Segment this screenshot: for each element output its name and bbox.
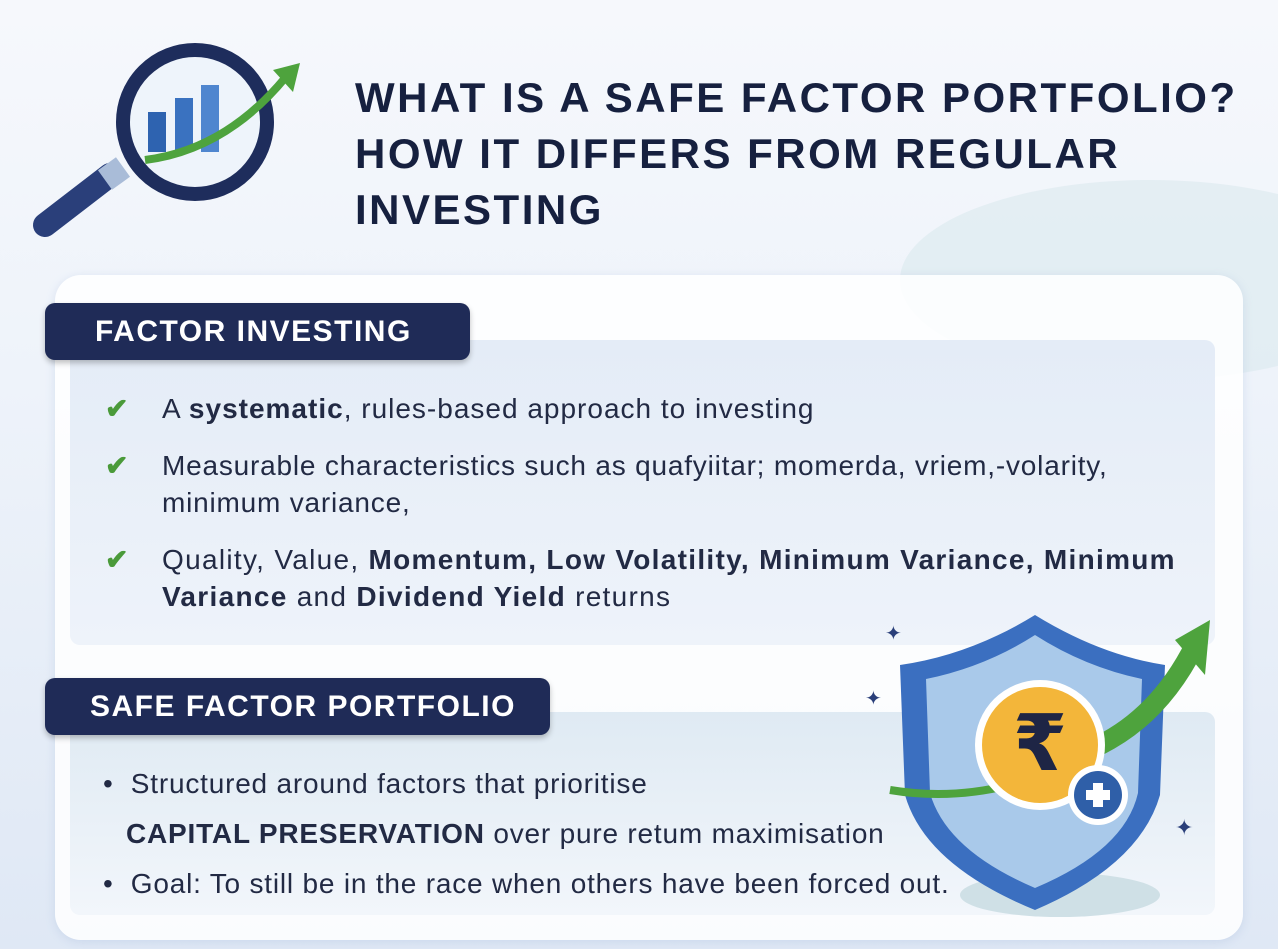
heading: factor investing: FACTOR INVESTING	[95, 315, 412, 348]
panel: safe factor portfolio	[70, 712, 1215, 915]
icon: shield with rupee coin and arrow: ✦	[865, 688, 882, 710]
icon: magnifying glass with bar chart	[33, 43, 300, 237]
bullet list: factor investing: ✔	[105, 393, 129, 424]
bullet list: safe factor portfolio	[103, 768, 950, 899]
bullet list: factor investing: Variance and Dividend Yield returns	[162, 581, 671, 612]
bullet list: factor investing	[105, 393, 1176, 612]
bullet list: factor investing: ✔	[105, 450, 129, 481]
bullet list: safe factor portfolio: • Structured around factors that prioritise	[103, 768, 648, 799]
bullet list: factor investing: Quality, Value, Momentum, Low Volatility, Minimum Variance, Minimum	[162, 544, 1176, 575]
heading: safe factor portfolio: SAFE FACTOR PORTFOLIO	[90, 690, 516, 723]
bullet list: factor investing: Measurable characteristics such as quafyiitar; momerda, vriem,-volarity,	[162, 450, 1108, 481]
bullet list: safe factor portfolio: CAPITAL PRESERVATION over pure retum maximisation	[126, 818, 885, 849]
main card	[55, 275, 1243, 940]
icon: shield with rupee coin and arrow	[865, 615, 1210, 917]
title: INVESTING	[355, 186, 604, 233]
title: HOW IT DIFFERS FROM REGULAR	[355, 130, 1120, 177]
bullet list: factor investing: A systematic, rules-based approach to investing	[162, 393, 815, 424]
title	[355, 74, 1238, 233]
background decorative blob	[900, 180, 1278, 380]
bullet list: factor investing: minimum variance,	[162, 487, 411, 518]
bullet list: factor investing: ✔	[105, 544, 130, 575]
title: WHAT IS A SAFE FACTOR PORTFOLIO?	[355, 74, 1238, 121]
heading: safe factor portfolio	[45, 678, 550, 735]
bullet list: safe factor portfolio: • Goal: To still be in the race when others have been forced out.	[103, 868, 950, 899]
icon: shield with rupee coin and arrow: ✦	[885, 623, 902, 645]
heading: factor investing	[45, 303, 470, 360]
panel: factor investing	[70, 340, 1215, 645]
icon: shield with rupee coin and arrow: ✦	[1175, 815, 1193, 840]
icon: shield with rupee coin and arrow: ₹	[1013, 699, 1067, 787]
